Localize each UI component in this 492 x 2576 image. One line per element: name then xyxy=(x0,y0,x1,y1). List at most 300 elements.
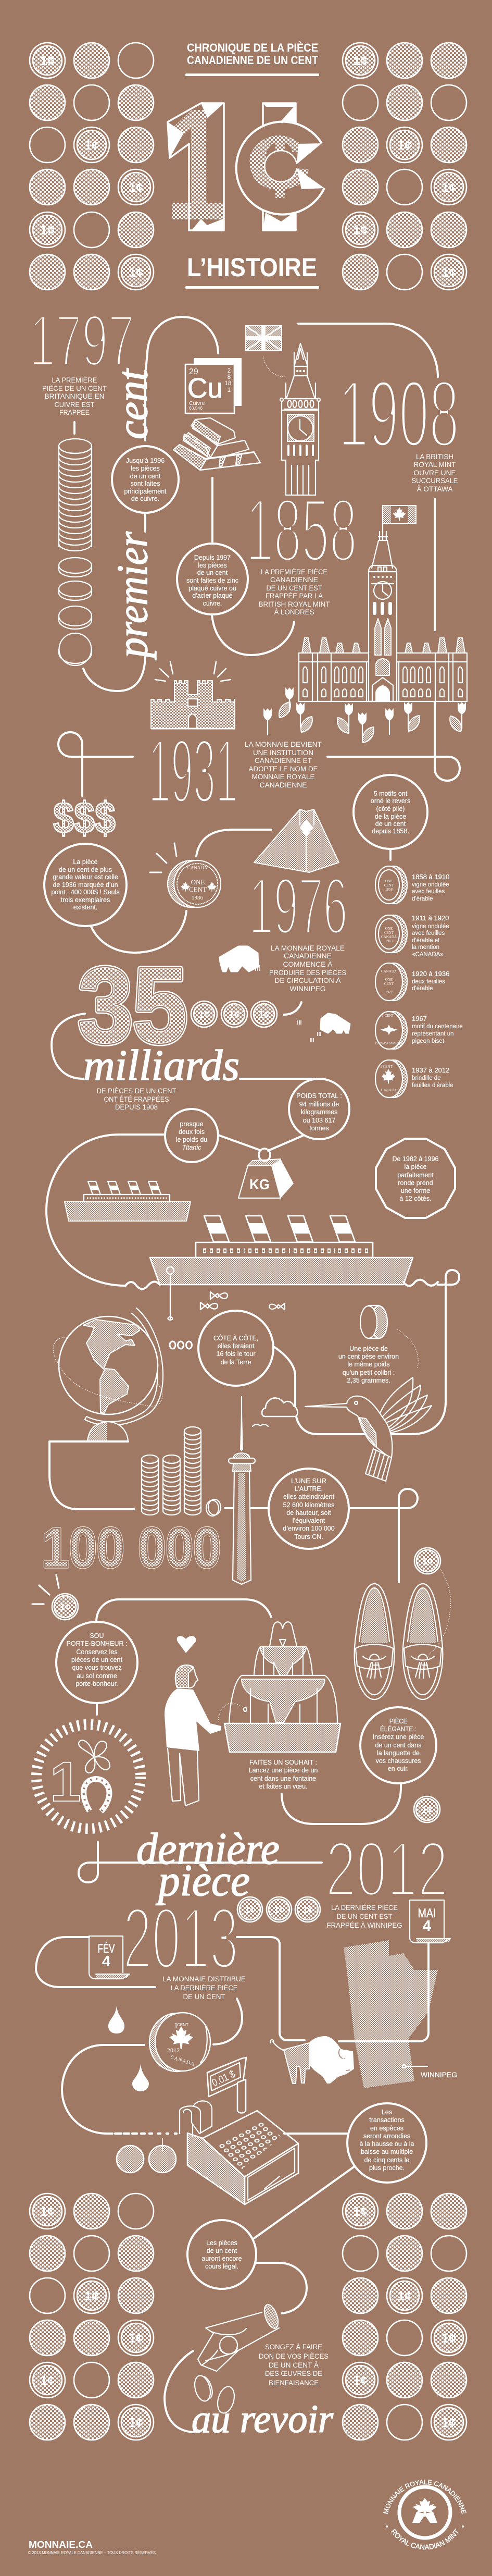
heading: L'HISTOIRE: L’HISTOIRE xyxy=(187,253,317,282)
text: Winnipeg production: LA MONNAIE ROYALE xyxy=(271,944,345,952)
falling coins xyxy=(59,558,92,665)
text: Ottawa branch: OUVRE UNE xyxy=(413,469,456,477)
icon: small bird xyxy=(253,1424,268,1426)
text: Winnipeg production: DE CIRCULATION À xyxy=(275,976,341,984)
callout: legal tender: de un cent xyxy=(207,2247,237,2254)
text: 35 billion coins xyxy=(97,1087,176,1111)
text: donate: SONGEZ À FAIRE xyxy=(265,2343,322,2351)
coin designs column: feuilles d'érable xyxy=(412,1082,453,1089)
callout: stacked height: l’équivalent xyxy=(293,1517,325,1524)
callout: side by side: elles feraient xyxy=(218,1342,255,1350)
callout: elegant coin: la languette de xyxy=(377,1749,420,1757)
text: first British cent: LA PREMIÈRE xyxy=(52,376,97,384)
coin designs column: 1858 à 1910 xyxy=(412,873,449,881)
coin designs column: CANADA xyxy=(381,935,397,939)
text: make a wish: Lancez une pièce de un xyxy=(249,1767,318,1774)
callout: 5 designs: orné le revers xyxy=(371,797,410,805)
coin 2012: 2012 xyxy=(167,2047,180,2054)
text: donate xyxy=(259,2343,329,2387)
coin grid: top right: 1¢ xyxy=(353,223,368,238)
callout: until 1996: sont faites xyxy=(131,480,160,487)
callout: stacked height: 52 600 kilomètres xyxy=(283,1501,334,1509)
illustration: Winnipeg mint pyramid xyxy=(254,809,339,872)
text: donate: DON DE VOS PIÈCES xyxy=(259,2352,329,2360)
coin grid: bottom right xyxy=(343,2193,466,2440)
calendar: 4 May: 4 xyxy=(423,1918,431,1934)
coin designs column: CANADA xyxy=(381,969,397,973)
periodic table: copper: 8 xyxy=(228,374,231,380)
text: donate: DE UN CENT À xyxy=(269,2361,319,2369)
text: donate: DES ŒUVRES DE xyxy=(265,2369,322,2377)
callout: elegant coin: de un cent dans xyxy=(375,1742,421,1749)
callout: since 1997: de un cent xyxy=(197,569,228,576)
coins replacing zeros: 1¢ xyxy=(258,1009,270,1020)
callout: total weight: kilogrammes xyxy=(301,1108,337,1116)
coin grid: top right: 1¢ xyxy=(397,138,412,153)
text: mint distributes last cent: DE UN CENT xyxy=(183,1992,225,2001)
hero numeral: 1 cent xyxy=(165,76,324,253)
coin 2012: CANADA xyxy=(170,2054,196,2067)
illustration: 1936 coin: CENT xyxy=(189,885,207,893)
illustration: Titanic xyxy=(150,1216,413,1285)
callout: side by side: CÔTE À CÔTE, xyxy=(213,1334,258,1342)
callout: since 1997: les pièces xyxy=(198,562,227,569)
lucky coin with rays xyxy=(32,1575,78,1620)
text: first Canadian cent: BRITISH ROYAL MINT xyxy=(258,600,330,608)
periodic table: copper: 63,546 xyxy=(189,405,203,411)
script: premier cent: premier xyxy=(108,532,157,660)
text: hummingbird weight: un cent pèse environ xyxy=(338,1353,399,1360)
callout: legal tender xyxy=(187,2220,256,2289)
callout: 5 designs xyxy=(354,775,427,860)
single coin xyxy=(360,1305,387,1338)
callout: 5 designs: depuis 1858. xyxy=(372,828,409,835)
periodic table: copper: Cu xyxy=(187,373,223,404)
logo: Royal Canadian Mint xyxy=(383,2480,466,2549)
waves and loop connector xyxy=(125,1270,459,1434)
text: make a wish: FAITES UN SOUHAIT : xyxy=(249,1759,317,1766)
coin designs column: motif du centenaire xyxy=(412,1024,463,1030)
text: Ottawa branch: À OTTAWA xyxy=(417,485,453,493)
callout: most valuable cent: de un cent de plus xyxy=(59,866,112,873)
coin designs column: brindille de xyxy=(412,1075,441,1081)
callout: Titanic: le poids du xyxy=(176,1136,207,1143)
coin designs column xyxy=(375,866,463,1098)
coin grid: top right xyxy=(343,43,466,290)
illustration: penny loafers xyxy=(355,1584,443,1699)
coin designs column: deux feuilles xyxy=(412,979,445,985)
connectors: 1976 xyxy=(91,830,301,1015)
illustration: castle with rays xyxy=(151,662,235,729)
text: Royal Canadian Mint: CANADIENNE xyxy=(259,781,307,789)
callout: cash rounding: seront arrondies xyxy=(363,2133,410,2140)
text: first Canadian cent: À LONDRES xyxy=(274,608,314,616)
coins replacing zeros: 1¢ xyxy=(198,1009,210,1020)
text: make a wish xyxy=(249,1759,318,1790)
coin designs column: vigne ondulée xyxy=(412,923,449,930)
script: au revoir: au revoir xyxy=(192,2397,333,2441)
text: first Canadian cent xyxy=(258,568,330,616)
text: hummingbird weight: qu'un petit colibri : xyxy=(343,1369,395,1376)
year: 1797: 1797 xyxy=(29,299,134,381)
callout: most valuable cent: grande valeur est celle xyxy=(53,873,118,881)
callout: Titanic xyxy=(165,1109,218,1162)
callout: since 1997: d'acier plaqué xyxy=(192,592,233,599)
illustration: 1936 coin: 1936 xyxy=(192,895,203,901)
connector with loop: dernière xyxy=(79,1842,322,1882)
coin above loafers xyxy=(414,1548,440,1574)
calendar: 4 February: 4 xyxy=(102,1953,110,1970)
callout: 12 sides: ronde prend xyxy=(398,1179,433,1187)
script: premier cent xyxy=(108,367,157,660)
map: Manitoba xyxy=(344,1940,457,2088)
coin designs column: CENT xyxy=(384,931,394,935)
text: Winnipeg production: WINNIPEG xyxy=(289,984,326,993)
illustration: hand dropping coins xyxy=(192,2303,281,2415)
coin designs column: 1 CENT xyxy=(380,1065,393,1069)
callout: lucky penny: au sol comme xyxy=(77,1672,117,1680)
coin grid: top left xyxy=(30,43,154,290)
callout: since 1997: sont faites de zinc xyxy=(186,577,238,584)
callout: until 1996: de un cent xyxy=(130,473,161,480)
coin designs column: d'érable xyxy=(412,985,433,992)
coin designs column: vigne ondulée xyxy=(412,882,449,888)
icon: bison left xyxy=(220,946,260,971)
calendar: 4 May: MAI xyxy=(418,1906,436,1920)
coin designs column: 1920 à 1936 xyxy=(412,970,449,978)
infographic canvas: 1931 xyxy=(148,721,238,822)
callout: 12 sides: une forme xyxy=(401,1187,430,1194)
text: first British cent: FRAPPÉE xyxy=(59,408,90,416)
callout: stacked height: Tours CN. xyxy=(294,1533,323,1540)
callout: 5 designs: (côté pile) xyxy=(376,805,405,812)
three coins xyxy=(237,1897,320,1922)
text: Royal Canadian Mint: LA MONNAIE DEVIENT xyxy=(245,740,322,748)
coin grid: top right: 1¢ xyxy=(441,265,456,280)
callout: 5 designs: 5 motifs ont xyxy=(374,790,408,797)
connector: register to callout xyxy=(165,2134,355,2432)
illustration: cash register: 0,01 $ xyxy=(210,2068,237,2089)
callout: cash rounding: plus proche. xyxy=(369,2164,405,2172)
text: mint distributes last cent: LA MONNAIE DISTRIBUE xyxy=(162,1975,246,1983)
script: dernière pièce: dernière xyxy=(136,1823,280,1874)
footer: website and copyright: MONNAIE.CA xyxy=(29,2540,93,2550)
coin designs column: avec feuilles xyxy=(412,930,445,936)
big number: 35: 35 xyxy=(78,946,187,1065)
callout: 12 sides: parfaitement xyxy=(397,1172,434,1179)
text: first Canadian cent: FRAPPÉE PAR LA xyxy=(266,591,323,600)
text: first Canadian cent: LA PREMIÈRE PIÈCE xyxy=(261,568,327,576)
text: first Canadian cent: DE UN CENT EST xyxy=(267,584,322,592)
title xyxy=(185,41,319,76)
periodic table: copper: 18 xyxy=(225,380,231,387)
callout: most valuable cent xyxy=(44,844,127,926)
coin grid: top left: 1¢ xyxy=(129,265,143,280)
text: first Canadian cent: CANADIENNE xyxy=(270,575,318,584)
coin grid: top left: 1¢ xyxy=(40,223,55,238)
illustration: CN Tower xyxy=(229,1397,255,1584)
coin designs column: ONE xyxy=(385,927,393,931)
big number: 35: 35 xyxy=(78,946,187,1065)
text: mint distributes last cent: LA DERNIÈRE PIÈCE xyxy=(171,1983,237,1992)
three coins: 1¢ xyxy=(245,1905,255,1915)
connectors: 1931 xyxy=(58,702,460,796)
callout: lucky penny: PORTE-BONHEUR : xyxy=(67,1640,127,1647)
logo: Royal Canadian Mint: ROYAL CANADIAN MINT xyxy=(390,2529,459,2549)
map: Manitoba: WINNIPEG xyxy=(421,2070,457,2079)
text: hummingbird weight: Une pièce de xyxy=(349,1345,388,1352)
text: 35 billion coins: DE PIÈCES DE UN CENT xyxy=(97,1087,176,1095)
callout: elegant coin: Insérez une pièce xyxy=(373,1733,424,1741)
coin grid: top left: 1¢ xyxy=(84,138,99,153)
callout: since 1997 xyxy=(177,544,248,614)
coin designs column: d'érable xyxy=(412,896,433,902)
coin grid: bottom right: 1¢ xyxy=(441,2415,456,2430)
text: 35 billion coins: DEPUIS 1908 xyxy=(115,1103,158,1111)
illustration: Big Ben xyxy=(280,343,320,495)
lucky coin with rays: 1¢ xyxy=(60,1602,70,1612)
connectors: milliards xyxy=(46,1014,312,1286)
coin grid: bottom left: 1¢ xyxy=(129,2415,143,2430)
callout: stacked height: L’UNE SUR xyxy=(291,1477,326,1485)
coin designs column: ONE xyxy=(385,978,393,982)
year: 2013: 2013 xyxy=(123,1889,238,1987)
callout: 5 designs: de la pièce xyxy=(375,813,406,820)
coin designs column: pigeon biset xyxy=(412,1038,445,1044)
text: last cent struck xyxy=(327,1903,402,1929)
text: Winnipeg production xyxy=(269,944,346,993)
callout: cash rounding: transactions xyxy=(369,2116,405,2124)
illustration: man with heart xyxy=(165,1636,221,1806)
coin designs column: CANADA 1867-1967 xyxy=(375,1042,402,1045)
callout: stacked height xyxy=(269,1469,349,1549)
connector paths: section 1797 xyxy=(74,317,438,691)
callout: total weight: ou 103 617 xyxy=(303,1117,335,1124)
periodic table: copper: Cuivre xyxy=(189,400,205,406)
connector: globe to stack xyxy=(49,1441,134,1509)
callout: lucky penny: que vous trouvez xyxy=(72,1664,122,1671)
callout: side by side: 16 fois le tour xyxy=(216,1350,256,1358)
big number: 100 000: 100 000 xyxy=(42,1516,221,1579)
connector: shoes to fountain text xyxy=(282,1784,401,1824)
text: Royal Canadian Mint xyxy=(245,740,322,789)
coin stacks xyxy=(142,1427,221,1516)
coin grid: bottom right: 1¢ xyxy=(353,2373,368,2388)
periodic table: copper: 1 xyxy=(228,387,231,393)
text: first British cent: CUIVRE EST xyxy=(54,400,95,409)
coin designs column: représentant un xyxy=(412,1031,454,1037)
callout: cash rounding: baisse au multiple xyxy=(361,2148,413,2155)
coin 2012 xyxy=(149,2013,210,2072)
lucky emblem: rays, 1, clover, horseshoe: 1 xyxy=(50,1750,81,1813)
big number: 100 000: 100 000 xyxy=(42,1516,221,1579)
coin grid: top right: 1¢ xyxy=(353,54,368,68)
callout: most valuable cent: de 1936 marquée d’un xyxy=(53,881,118,889)
coin designs column: 1922 xyxy=(385,990,393,994)
icon: tears xyxy=(108,2006,149,2091)
year: 1858: 1858 xyxy=(246,479,357,581)
coin designs column: 1858 xyxy=(385,888,393,892)
callout: cash rounding: en espèces xyxy=(370,2125,403,2132)
callout: stacked height: L’AUTRE, xyxy=(295,1485,323,1493)
callout: total weight: 94 millions de xyxy=(299,1101,339,1108)
big number: 100 000: 100 000 xyxy=(42,1516,221,1579)
callout: legal tender: Les pièces xyxy=(206,2239,237,2247)
illustration: 1936 coin: ONE xyxy=(191,878,205,886)
periodic table: copper: 29 xyxy=(189,367,198,376)
text: Royal Canadian Mint: ADOPTE LE NOM DE xyxy=(249,765,318,773)
coin near connector: 1¢ xyxy=(422,1805,432,1815)
text: Royal Canadian Mint: CANADIENNE ET xyxy=(255,756,312,765)
text: Ottawa branch: SUCCURSALE xyxy=(411,476,458,485)
coin designs column: avec feuilles xyxy=(412,889,445,895)
coin grid: bottom left: 1¢ xyxy=(40,2373,55,2388)
callout: stacked height: d’environ 100 000 xyxy=(283,1525,335,1532)
coin designs column: la mention xyxy=(412,944,439,951)
callout: side by side: de la Terre xyxy=(221,1359,251,1366)
callout: since 1997: plaqué cuivre ou xyxy=(188,585,236,592)
callout: 12 sides: De 1982 à 1996 xyxy=(393,1155,439,1163)
coin designs column: 1937 à 2012 xyxy=(412,1066,449,1074)
coin stack xyxy=(59,439,92,551)
callout: total weight: POIDS TOTAL : xyxy=(296,1092,342,1100)
connector: loop to register xyxy=(62,2045,176,2151)
text: first British cent: PIÈCE DE UN CENT xyxy=(42,384,107,392)
script: milliards: milliards xyxy=(83,1041,239,1090)
illustration: cash register xyxy=(180,2057,298,2204)
tulips xyxy=(263,687,466,743)
illustration: hummingbird xyxy=(305,1377,432,1481)
coin grid: top left: 1¢ xyxy=(40,54,55,68)
callout: lucky penny: pièces de un cent xyxy=(71,1656,123,1663)
illustration: 1936 coin: CANADA xyxy=(187,865,208,870)
footer: website and copyright xyxy=(28,2540,157,2555)
callout: elegant coin: vos chaussures xyxy=(376,1757,421,1765)
dollar signs: $$$ xyxy=(53,793,116,842)
callout: cash rounding: Les xyxy=(382,2109,392,2116)
coin grid: bottom left: 1¢ xyxy=(129,2331,143,2346)
callout: 12 sides xyxy=(376,1139,455,1218)
connector: stack loop xyxy=(225,1489,418,1582)
text: Ottawa branch: LA BRITISH xyxy=(416,452,453,461)
text: mint distributes last cent xyxy=(162,1975,246,2001)
connector: luck to fountain xyxy=(96,1599,271,1621)
text: last cent struck: FRAPPÉE À WINNIPEG xyxy=(327,1921,402,1929)
text: Ottawa branch xyxy=(411,452,458,493)
periodic table: copper xyxy=(185,358,242,413)
gold bars xyxy=(173,418,260,470)
coin designs column: CANADA xyxy=(381,1088,397,1092)
coin 2012: CENT xyxy=(177,2023,188,2027)
coin designs column: 1 CENT xyxy=(382,1014,394,1018)
callout: most valuable cent: point : 400 000$ ! Seuls xyxy=(51,889,120,896)
callout: cash rounding: à la hausse ou à la xyxy=(360,2140,414,2148)
coin grid: bottom left xyxy=(30,2193,154,2440)
callout: lucky penny: Conservez les xyxy=(76,1648,118,1656)
callout: elegant coin: ÉLÉGANTE : xyxy=(380,1725,417,1733)
fish xyxy=(200,1292,285,1310)
callout: until 1996: principalement xyxy=(124,488,167,495)
text: make a wish: et faites un vœu. xyxy=(259,1783,308,1790)
illustration: 1936 coin xyxy=(150,843,221,907)
text: hummingbird weight: le même poids xyxy=(347,1361,390,1368)
title: CHRONIQUE DE LA PIÈCE xyxy=(187,41,318,54)
coin designs column: ONE xyxy=(385,879,393,883)
illustration: bison and map xyxy=(271,2036,354,2084)
calendar: 4 February xyxy=(89,1936,130,1979)
text: Royal Canadian Mint: UNE INSTITUTION xyxy=(253,748,313,757)
icon: kilogram weight xyxy=(238,1149,294,1198)
callout: most valuable cent: existent. xyxy=(73,904,97,911)
callout: most valuable cent: trois exemplaires xyxy=(61,896,110,904)
coin grid: bottom left: 1¢ xyxy=(40,2204,55,2219)
big number: 35: 35 xyxy=(78,946,187,1065)
coin designs column: 1913 xyxy=(385,939,393,943)
text: first British cent xyxy=(42,376,107,416)
coin grid: bottom right: 1¢ xyxy=(397,2289,412,2303)
coin grid: top right: 1¢ xyxy=(441,180,456,195)
callout: most valuable cent: La pièce xyxy=(73,858,98,866)
coin 2012: 1 xyxy=(174,2022,178,2030)
callout: Titanic: deux fois xyxy=(179,1128,205,1136)
connectors: 2013 xyxy=(36,1937,428,2044)
coin designs column: CENT xyxy=(384,982,394,986)
callout: cash rounding: de cinq cents le xyxy=(364,2156,409,2164)
coins replacing zeros: 1¢ xyxy=(229,1009,240,1020)
callout: until 1996: de cuivre. xyxy=(131,495,159,502)
coin grid: bottom right: 1¢ xyxy=(353,2204,368,2219)
anchor chain xyxy=(167,1267,174,1320)
text: Royal Canadian Mint: MONNAIE ROYALE xyxy=(252,772,314,781)
illustration: globe xyxy=(53,1308,163,1441)
icon: bison right xyxy=(298,1014,350,1042)
text: 35 billion coins: ONT ÉTÉ FRAPPÉES xyxy=(104,1095,169,1103)
text: first British cent: BRITANNIQUE EN xyxy=(45,392,104,400)
small falling coin xyxy=(244,1707,247,1711)
icon: kilogram weight: KG xyxy=(249,1176,270,1192)
callout: 12 sides: la pièce xyxy=(404,1163,427,1170)
callout: total weight: tonnes xyxy=(309,1125,329,1132)
text: last cent struck: DE UN CENT EST xyxy=(336,1912,393,1920)
two plain coins xyxy=(117,2146,176,2173)
coin above loafers: 1¢ xyxy=(422,1556,433,1567)
text: hummingbird weight xyxy=(338,1345,399,1384)
title: CANADIENNE DE UN CENT xyxy=(187,54,318,67)
calendar: 4 May xyxy=(410,1900,450,1943)
year: 1976: 1976 xyxy=(249,861,348,951)
text: Winnipeg production: CANADIENNE xyxy=(284,952,332,960)
callout: legal tender: cours légal. xyxy=(205,2263,238,2270)
callout: until 1996: les pièces xyxy=(131,465,160,472)
callout: lucky penny: SOU xyxy=(90,1632,104,1640)
illustration: small ship xyxy=(65,1181,191,1221)
three coins: 1¢ xyxy=(302,1905,313,1915)
callout: Titanic: Titanic xyxy=(182,1144,201,1151)
text: Ottawa branch: ROYAL MINT xyxy=(413,460,456,469)
coin grid: bottom right: 1¢ xyxy=(441,2331,456,2346)
callout: lucky penny xyxy=(56,1622,137,1715)
script: premier cent: cent xyxy=(108,367,157,439)
text: Winnipeg production: PRODUIRE DES PIÈCES xyxy=(269,968,346,977)
callout: since 1997: cuivre. xyxy=(203,600,222,607)
flag: United Kingdom xyxy=(246,326,282,351)
calendar: 4 February: FÉV xyxy=(98,1942,115,1956)
icon: cloud xyxy=(262,1398,298,1416)
three coins: 1¢ xyxy=(274,1905,284,1915)
text: donate: BIENFAISANCE xyxy=(269,2378,319,2387)
footer: website and copyright: © 2013 MONNAIE ROYALE CANADIENNE – TOUS DROITS RÉSERVÉS. xyxy=(28,2550,157,2555)
text: last cent struck: LA DERNIÈRE PIÈCE xyxy=(331,1903,398,1912)
